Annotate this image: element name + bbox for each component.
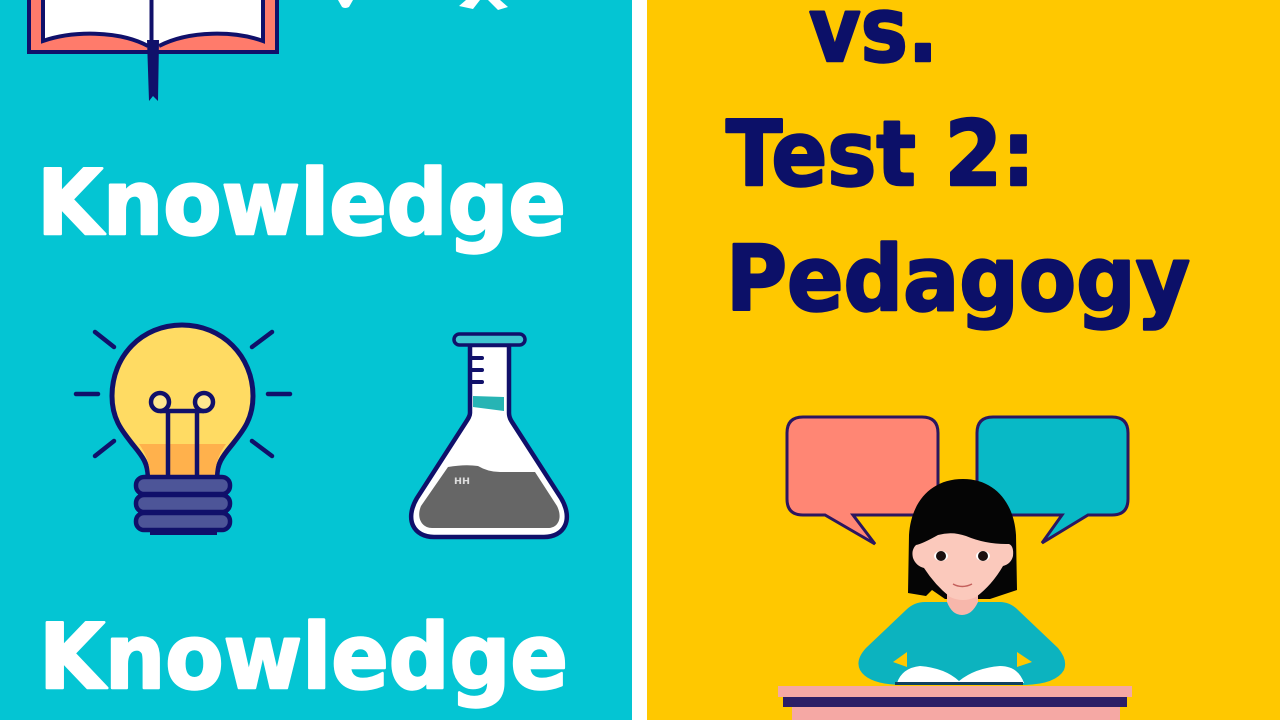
heading: first Knowledge: Knowledge — [37, 151, 566, 256]
sweater — [858, 602, 1065, 685]
heading: second Knowledge: Knowledge — [39, 605, 568, 710]
face — [912, 533, 1013, 600]
illustration: speech bubble coral — [787, 417, 938, 544]
open book — [897, 666, 1024, 683]
heading: Test 2: Test 2: — [726, 102, 1035, 207]
illustration: girl reading at desk — [778, 479, 1132, 720]
icon: light bulb — [76, 325, 290, 535]
icon: open book — [29, 0, 277, 101]
icon: chemistry flask — [411, 334, 567, 537]
desk — [778, 686, 1132, 697]
panel: left teal background — [0, 0, 632, 720]
heading fragment: cropped letters at top edge — [338, 0, 508, 10]
flask label: HH — [454, 477, 470, 487]
illustration: speech bubble teal — [977, 417, 1128, 543]
neck — [947, 585, 978, 615]
desk gaps — [893, 652, 1032, 667]
hair — [908, 479, 1017, 599]
heading: Pedagogy: Pedagogy — [726, 227, 1190, 332]
panel: right yellow background — [647, 0, 1280, 720]
